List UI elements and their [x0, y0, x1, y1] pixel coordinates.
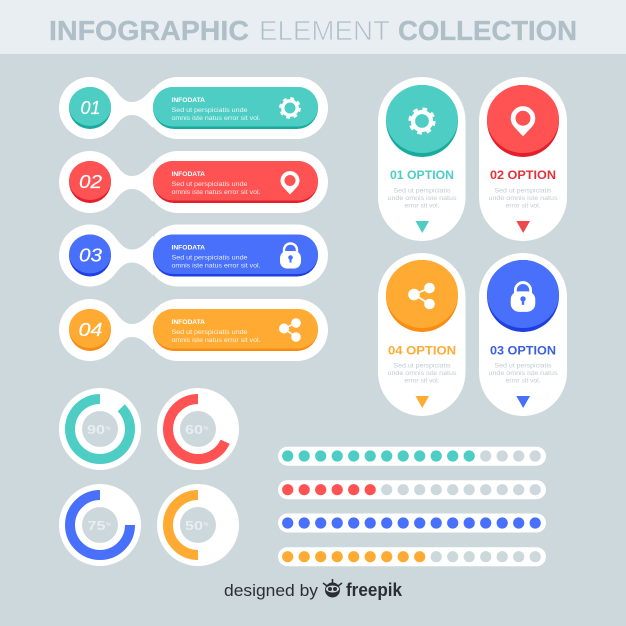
icon: gear: [410, 109, 434, 133]
donut chart 90%: [59, 388, 141, 470]
number badge 03: 03: [79, 244, 103, 266]
info bar 04: INFODATA: [172, 319, 205, 326]
arrow 02: [516, 221, 530, 233]
info bar 01: Sed ut perspiciatis unde: [172, 107, 248, 114]
description 01: Sed ut perspiciatis: [394, 188, 451, 194]
donut chart 50%: 50: [185, 519, 203, 533]
icon disc 03: [487, 260, 559, 332]
title: INFOGRAPHIC: [49, 15, 249, 46]
title: ELEMENT: [259, 15, 390, 46]
description 02: Sed ut perspiciatis: [494, 188, 552, 194]
description 04: error sit vol.: [404, 378, 440, 384]
icon disc 04: [386, 260, 458, 332]
panel: row 01: [59, 77, 328, 139]
description 03: Sed ut perspiciatis: [494, 362, 552, 370]
number badge 03: [69, 234, 111, 276]
info bar 04: [153, 309, 318, 351]
number badge 02: [69, 161, 111, 203]
white capsule 02: [59, 151, 328, 213]
description 03: error sit vol.: [506, 378, 541, 384]
description 04: Sed ut perspiciatis: [394, 362, 451, 370]
arrow 03: [516, 396, 530, 408]
title: [49, 15, 577, 46]
option heading 02: 02 OPTION: [490, 168, 556, 182]
info bar 02: Sed ut perspiciatis unde: [172, 181, 248, 188]
icon: location pin: [280, 171, 300, 194]
description 02: [488, 188, 558, 210]
number badge 01: 01: [80, 97, 100, 118]
dot progress bar red: [278, 480, 546, 499]
info bar 01: omnis iste natus error sit vol.: [172, 115, 261, 122]
number badge 02: 02: [79, 171, 103, 192]
dot progress bar orange: [278, 547, 546, 566]
info bar 01: [153, 87, 318, 129]
info bar 04: Sed ut perspiciatis unde: [172, 329, 248, 336]
icon: gear: [280, 98, 300, 118]
donut chart 75%: %: [106, 522, 111, 528]
icon: share: [408, 283, 435, 309]
dot progress bar teal: [278, 447, 546, 466]
number badge 04: [69, 309, 111, 351]
footer credit: designed by: [224, 581, 319, 600]
icon: share: [279, 318, 301, 342]
donut chart 75%: 75: [88, 519, 106, 533]
info bar 01: INFODATA: [172, 97, 205, 104]
arrow 04: [416, 396, 429, 408]
panel: option card 04: [378, 253, 466, 416]
panel: row 04: [59, 299, 328, 361]
panel: option card 02: [479, 77, 567, 241]
icon: padlock: [280, 244, 301, 268]
arrow 01: [416, 221, 429, 233]
panel: row 03: [59, 224, 328, 286]
title: COLLECTION: [398, 15, 577, 46]
donut chart 60%: 60: [185, 423, 203, 437]
info bar 02: omnis iste natus error sit vol.: [172, 189, 261, 196]
panel: option card 03: [479, 253, 567, 416]
footer credit: freepik: [346, 580, 403, 600]
panel: row 02: [59, 151, 328, 213]
icon: location pin: [511, 106, 535, 136]
option heading 01: 01 OPTION: [390, 168, 454, 182]
white capsule 03: [59, 224, 328, 286]
description 01: unde omnis iste natus: [388, 195, 457, 202]
description 01: error sit vol.: [404, 202, 440, 210]
icon: freepik bee: [323, 579, 342, 598]
donut chart 60%: %: [204, 426, 208, 432]
icon: padlock: [511, 283, 535, 312]
donut chart 50%: [157, 484, 239, 566]
description 04: unde omnis iste natus: [388, 370, 457, 377]
number badge 01: [69, 87, 111, 129]
donut chart 50%: %: [204, 522, 208, 528]
footer credit: [224, 579, 403, 600]
icon disc 01: [386, 85, 458, 157]
info bar 03: Sed ut perspiciatis unde: [172, 254, 248, 262]
white capsule 01: [59, 77, 328, 139]
info bar 03: [153, 234, 318, 276]
description 02: unde omnis iste natus: [488, 195, 558, 202]
option heading 04: 04 OPTION: [388, 344, 456, 358]
description 03: unde omnis iste natus: [488, 370, 558, 377]
donut chart 60%: [157, 388, 239, 470]
info bar 02: INFODATA: [172, 171, 205, 178]
info bar 03: INFODATA: [172, 244, 205, 252]
description 02: error sit vol.: [506, 202, 541, 210]
description 04: [388, 362, 457, 384]
header band: [0, 0, 626, 54]
donut chart 90%: 90: [87, 423, 105, 437]
panel: option card 01: [378, 77, 466, 241]
description 01: [388, 188, 457, 210]
white capsule 04: [59, 299, 328, 361]
option heading 03: 03 OPTION: [490, 344, 556, 358]
info bar 03: omnis iste natus error sit vol.: [172, 262, 261, 270]
info bar 04: omnis iste natus error sit vol.: [172, 337, 261, 344]
icon disc 02: [487, 85, 559, 157]
description 03: [488, 362, 558, 384]
info bar 02: [153, 161, 318, 203]
number badge 04: 04: [78, 319, 102, 340]
donut chart 75%: [59, 484, 141, 566]
donut chart 90%: %: [106, 426, 110, 432]
dot progress bar blue: [278, 514, 546, 532]
